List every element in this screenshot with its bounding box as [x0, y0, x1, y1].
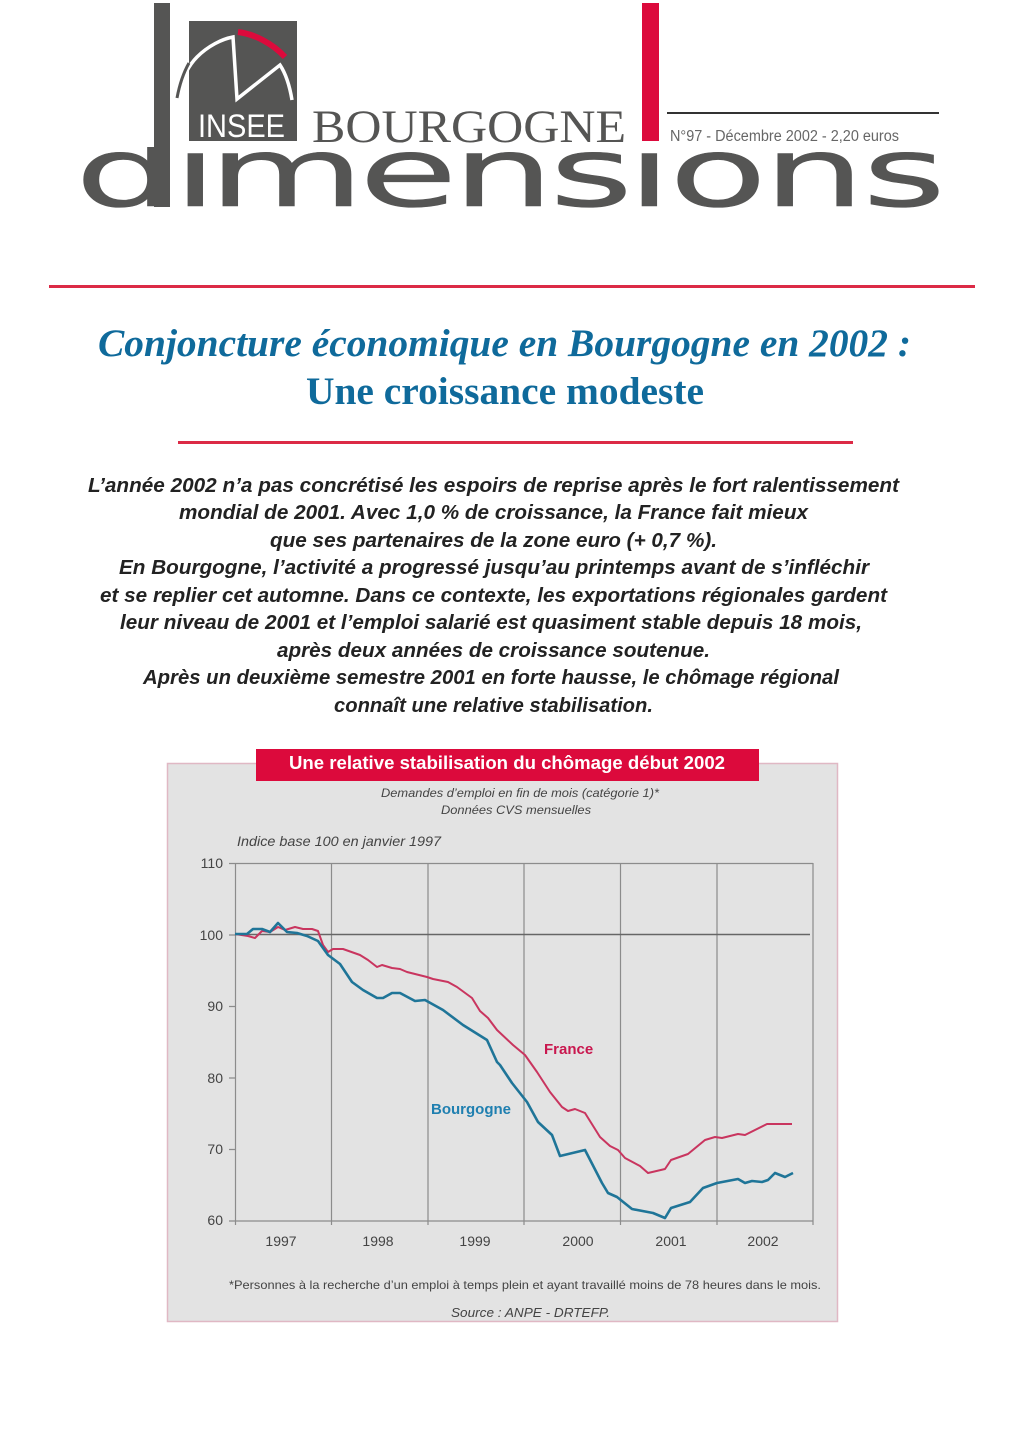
- axis caption: Indice base 100 en janvier 1997: [237, 833, 442, 849]
- intro text: Après un deuxième semestre 2001 en forte hausse, le chômage régional: [142, 667, 839, 689]
- y axis labels: 70: [207, 1141, 223, 1157]
- footnote: *Personnes à la recherche d’un emploi à temps plein et ayant travaillé moins de 78 heures dans le mois.: [229, 1278, 821, 1292]
- x axis labels: 1998: [362, 1233, 394, 1249]
- masthead: [83, 3, 939, 208]
- y axis labels: 60: [207, 1212, 223, 1228]
- title: Une croissance modeste: [306, 370, 704, 413]
- series: France: [235, 927, 792, 1173]
- source: Source : ANPE - DRTEFP.: [451, 1305, 610, 1320]
- chart heading: [256, 749, 759, 781]
- y axis labels: 80: [207, 1070, 223, 1086]
- line chart: [200, 855, 813, 1249]
- series: Bourgogne: [235, 923, 793, 1218]
- y axis labels: 110: [201, 855, 223, 871]
- title: Conjoncture économique en Bourgogne en 2002 :: [98, 322, 911, 365]
- wordmark: dimensions: dimensions: [75, 118, 946, 229]
- y axis labels: [200, 855, 223, 1228]
- x axis labels: 2001: [655, 1233, 687, 1249]
- x axis labels: [265, 1233, 779, 1249]
- issue rule: [667, 112, 939, 114]
- intro text: et se replier cet automne. Dans ce contexte, les exportations régionales gardent: [100, 585, 888, 607]
- logo: INSEE: INSEE: [198, 108, 285, 144]
- intro text: mondial de 2001. Avec 1,0 % de croissance, la France fait mieux: [179, 502, 809, 524]
- intro text: connaît une relative stabilisation.: [334, 695, 653, 717]
- title: [98, 322, 911, 413]
- logo: INSEE: [177, 21, 297, 144]
- region name: BOURGOGNE: [312, 101, 626, 153]
- y axis labels: 90: [207, 998, 223, 1014]
- x axis labels: 1999: [459, 1233, 491, 1249]
- intro text: [88, 475, 900, 717]
- top red rule: [49, 285, 975, 288]
- x axis labels: 2002: [747, 1233, 779, 1249]
- chart subtitle: Demandes d’emploi en fin de mois (catégorie 1)*: [381, 786, 659, 800]
- intro text: que ses partenaires de la zone euro (+ 0,7 %).: [270, 530, 717, 552]
- label: Bourgogne: Bourgogne: [431, 1101, 511, 1118]
- chart heading: Une relative stabilisation du chômage début 2002: [289, 753, 725, 773]
- issue details: N°97 - Décembre 2002 - 2,20 euros: [670, 128, 899, 145]
- panel background: [168, 764, 838, 1322]
- intro text: après deux années de croissance soutenue.: [277, 640, 710, 662]
- y axis labels: 100: [200, 927, 223, 943]
- chart subtitle: [381, 786, 659, 817]
- x axis labels: 2000: [562, 1233, 594, 1249]
- intro text: L’année 2002 n’a pas concrétisé les espoirs de reprise après le fort ralentissement: [88, 475, 900, 497]
- panel: chart: [168, 749, 838, 1322]
- intro text: En Bourgogne, l’activité a progressé jusqu’au printemps avant de s’infléchir: [119, 557, 870, 579]
- x axis labels: 1997: [265, 1233, 297, 1249]
- red vertical bar: [642, 3, 659, 141]
- chart subtitle: Données CVS mensuelles: [441, 803, 591, 817]
- lower red rule: [178, 441, 853, 444]
- stem of the d: [154, 3, 170, 207]
- intro text: leur niveau de 2001 et l’emploi salarié est quasiment stable depuis 18 mois,: [120, 612, 862, 634]
- label: France: France: [544, 1041, 593, 1058]
